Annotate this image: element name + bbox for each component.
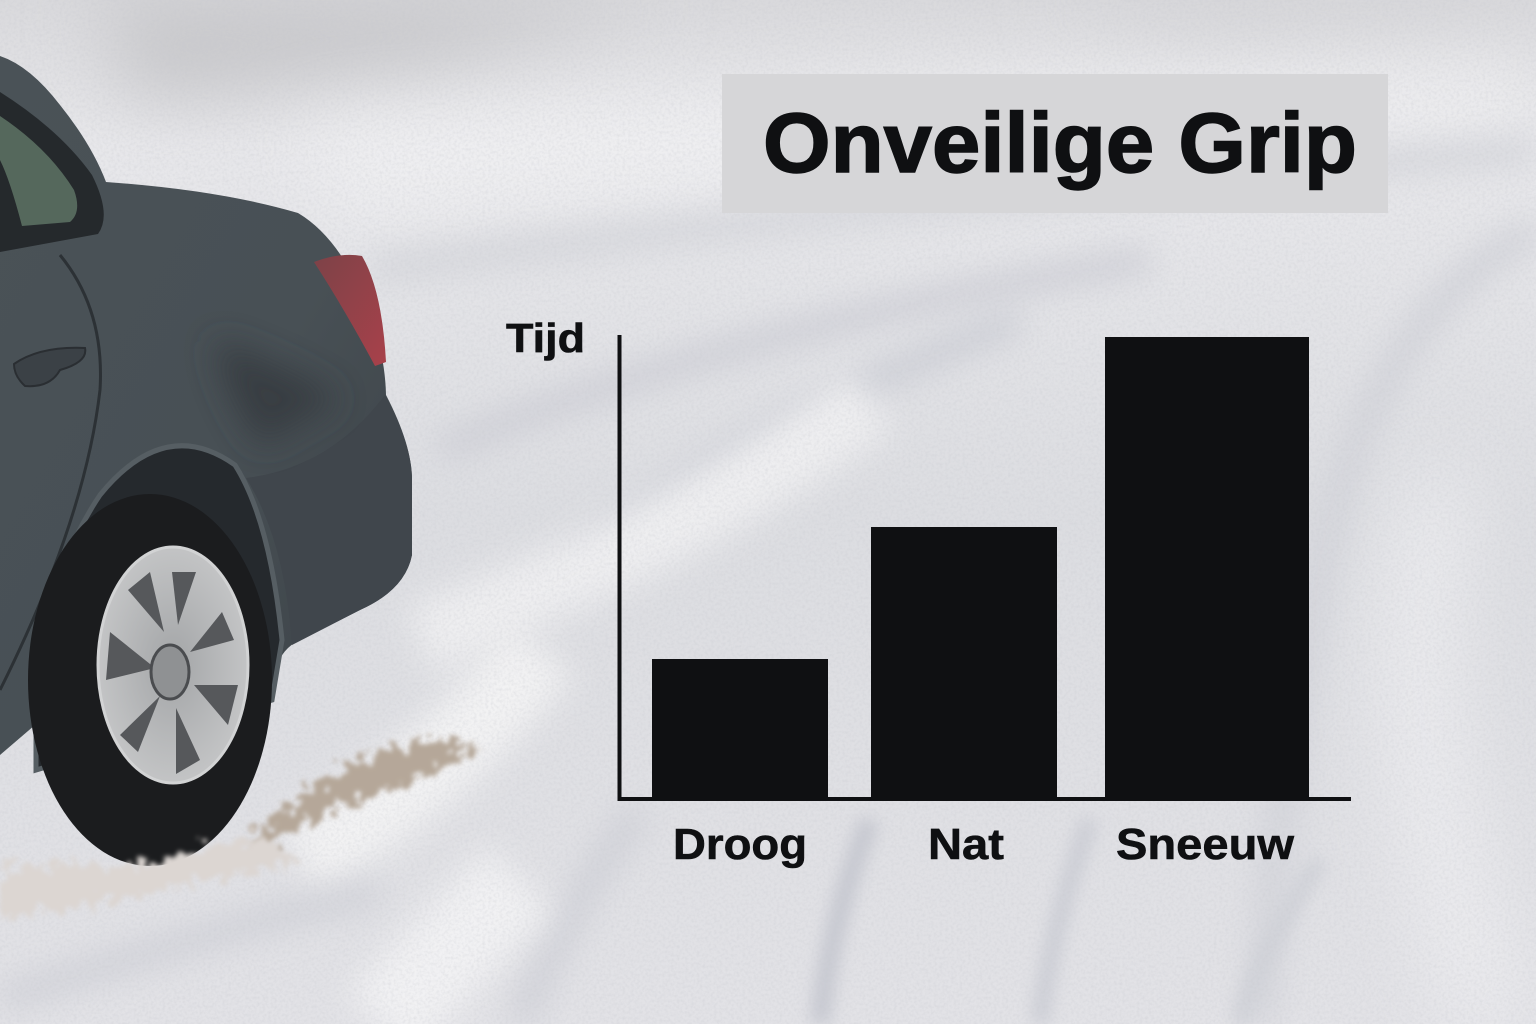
bar chart: braking time <box>506 315 1351 869</box>
car <box>0 56 480 920</box>
bar: Nat <box>871 527 1057 799</box>
tail lamp <box>314 255 386 366</box>
door shut line <box>0 255 100 690</box>
tyre spray <box>250 742 480 860</box>
door handle <box>14 348 85 386</box>
bar: Droog <box>652 659 828 799</box>
window frame <box>0 92 104 252</box>
y axis label: Tijd <box>506 315 585 361</box>
title: Onveilige Grip <box>763 96 1357 190</box>
axes <box>620 335 1351 799</box>
title box <box>722 74 1388 213</box>
wheel rim <box>98 547 248 783</box>
bar: Sneeuw <box>1105 337 1309 799</box>
snow at tyre contact <box>0 835 300 920</box>
tyre <box>28 494 272 866</box>
car body <box>0 56 412 755</box>
rim spokes <box>106 572 238 774</box>
rear fender shadow <box>215 340 340 445</box>
lower bumper shade <box>246 395 412 645</box>
hub <box>151 645 189 699</box>
label: Sneeuw: Sneeuw <box>1116 820 1295 869</box>
label: Nat: Nat <box>928 820 1004 869</box>
label: Droog: Droog <box>673 820 807 869</box>
wheel arch <box>36 446 282 770</box>
rear window <box>0 116 77 226</box>
